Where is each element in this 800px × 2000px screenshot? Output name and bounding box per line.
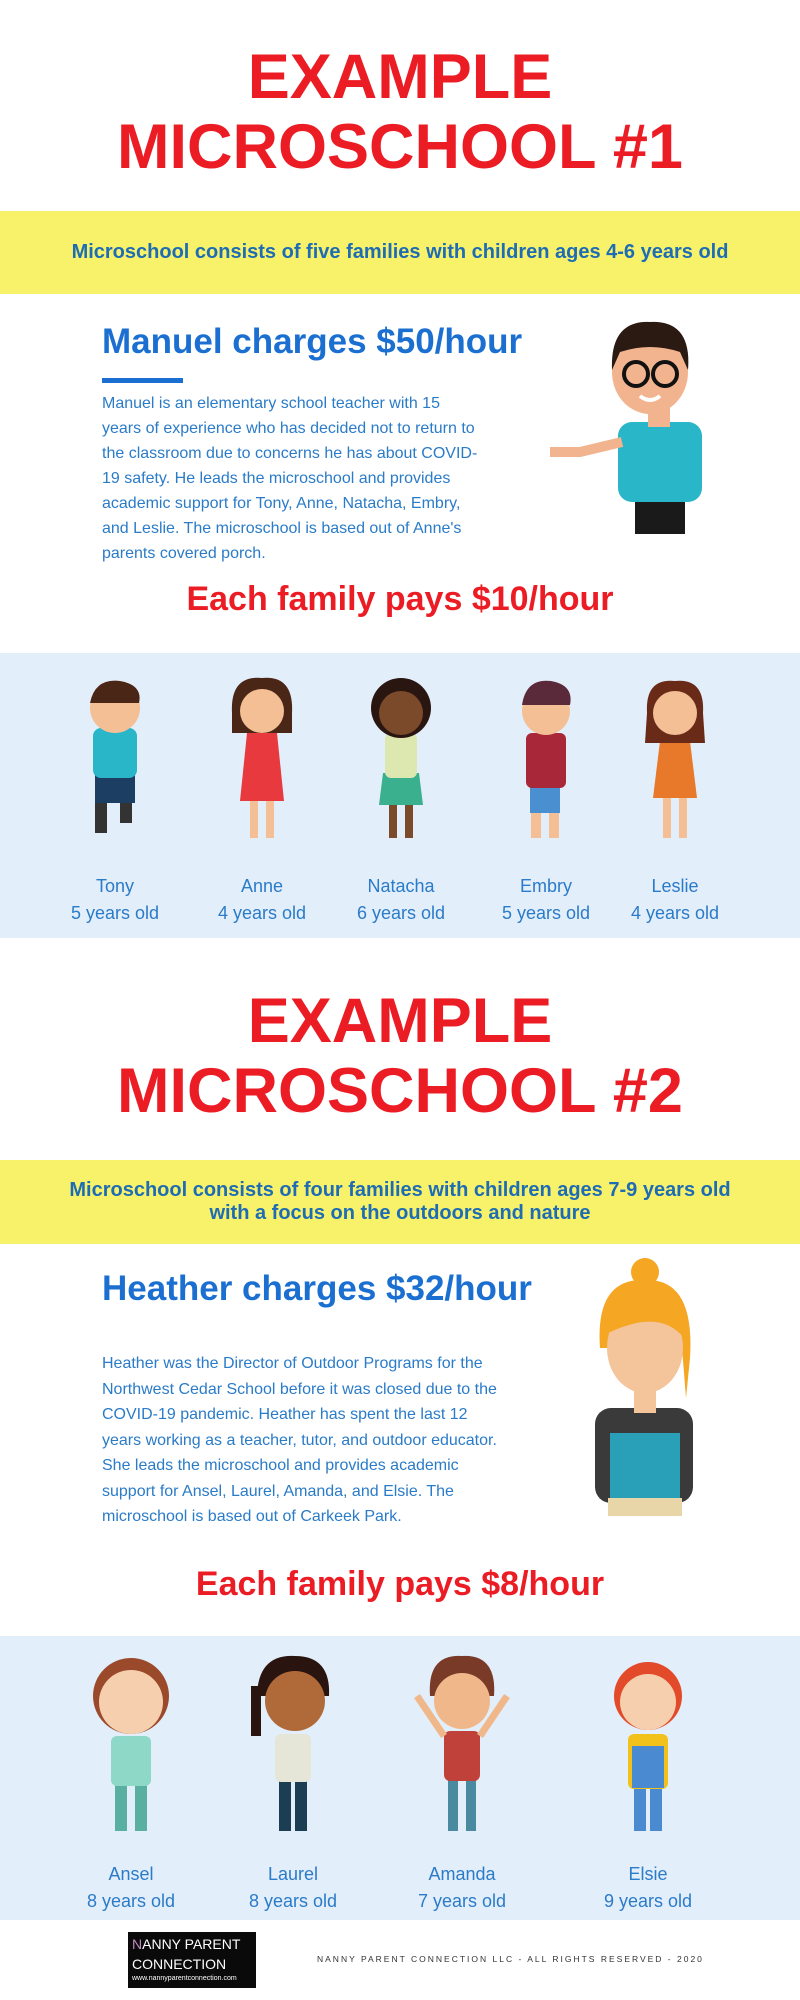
footer text: NANNY PARENT CONNECTION LLC - ALL RIGHTS RESERVED - 2020 [317,1954,704,1964]
text: each family pays 8: Each family pays $8/hour [196,1565,604,1603]
logo: Nanny Parent Connection: www.nannyparentconnection.com [132,1975,237,1982]
title: example microschool 2: EXAMPLE [248,986,552,1056]
banner: school 2 description [0,1160,800,1244]
child: Elsie: 9 years old [604,1891,692,1911]
child: Natacha: Natacha [367,876,435,896]
child: Laurel: Laurel [268,1864,318,1884]
child: Tony: Tony [96,876,134,896]
child: Leslie: 4 years old [631,903,719,923]
child: Natacha: 6 years old [357,903,445,923]
title: example microschool 1 [117,42,683,182]
child: Anne: Anne [241,876,283,896]
logo: Nanny Parent Connection: NANNY PARENT [132,1936,240,1952]
child: Amanda: 7 years old [418,1891,506,1911]
child: Natacha [357,678,445,923]
child: Laurel: 8 years old [249,1891,337,1911]
child: Anne [218,678,306,923]
banner: school 1 description [0,211,800,294]
child: Amanda [414,1656,510,1911]
panel: children group 2 [0,1636,800,1920]
title: example microschool 1: MICROSCHOOL #1 [117,112,683,182]
child: Leslie: Leslie [651,876,699,896]
child: Tony [71,680,159,923]
title: example microschool 2 [117,986,683,1126]
child: Anne: 4 years old [218,903,306,923]
banner: school 2 description: with a focus on the outdoors and nature [209,1202,591,1224]
child: Amanda: Amanda [428,1864,496,1884]
underline accent [102,378,183,383]
text: Manuel description: Manuel is an elementary school teacher with 15 years of experience who has decided not to return to the classroom due to concerns he has about COVID-19 safety. He leads the microschool and provides academic support for Tony, Anne, Natacha, Embry, and Leslie. The microschool is based out of Anne's parents covered porch. [102,395,477,562]
text: Heather description: Heather was the Director of Outdoor Programs for the Northwest Cedar School before it was closed due to the COVID-19 pandemic. Heather has spent the last 12 years working as a teacher, tutor, and outdoor educator. She leads the microschool and provides academic support for Ansel, Laurel, Amanda, and Elsie. The microschool is based out of Carkeek Park. [102,1355,497,1525]
heading: Manuel charges: Manuel charges $50/hour [102,322,522,361]
icon: teacher Manuel [550,322,702,534]
child: Embry [502,680,590,923]
heading: Heather charges: Heather charges $32/hour [102,1269,532,1308]
child: Embry: Embry [520,876,572,896]
child: Ansel: Ansel [108,1864,154,1884]
panel: children group 1 [0,653,800,938]
logo: Nanny Parent Connection: CONNECTION [132,1956,226,1972]
child: Elsie: Elsie [628,1864,668,1884]
banner: school 1 description: Microschool consists of five families with children ages 4-6 years old [72,241,728,263]
text: each family pays 10: Each family pays $10/hour [186,580,614,618]
title: example microschool 2: MICROSCHOOL #2 [117,1056,683,1126]
banner: school 2 description: Microschool consists of four families with children ages 7-9 years old [69,1179,731,1201]
title: example microschool 1: EXAMPLE [248,42,552,112]
child: Tony: 5 years old [71,903,159,923]
child: Elsie [604,1662,692,1911]
child: Embry: 5 years old [502,903,590,923]
child: Laurel [249,1656,337,1911]
icon: teacher Heather [595,1258,693,1516]
logo: Nanny Parent Connection [128,1932,256,1988]
child: Ansel [87,1658,175,1911]
child: Leslie [631,680,719,923]
child: Ansel: 8 years old [87,1891,175,1911]
